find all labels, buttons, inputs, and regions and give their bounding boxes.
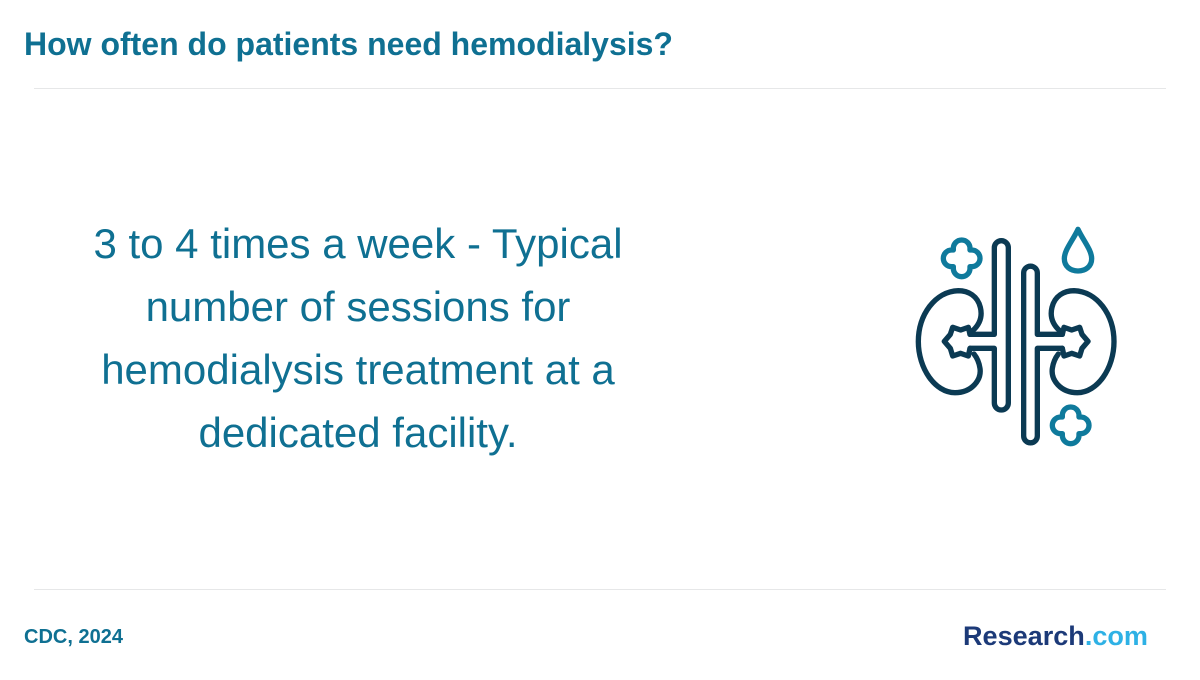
- right renal star: [1062, 327, 1088, 356]
- left kidney: [918, 291, 981, 393]
- icon: upper cross: [943, 240, 980, 277]
- right ureter tube: [1024, 266, 1062, 443]
- main statistic text: hemodialysis treatment at a: [101, 346, 615, 393]
- icon: water drop: [1064, 229, 1092, 271]
- left ureter tube: [970, 241, 1008, 410]
- title: How often do patients need hemodialysis?: [24, 26, 673, 62]
- main statistic text: [93, 220, 623, 456]
- source: CDC, 2024: [24, 626, 123, 648]
- left renal star: [944, 327, 970, 356]
- main statistic text: 3 to 4 times a week - Typical: [93, 220, 623, 267]
- icon: lower cross: [1052, 407, 1089, 444]
- main statistic text: dedicated facility.: [198, 409, 518, 456]
- right kidney: [1051, 291, 1114, 393]
- main statistic text: number of sessions for: [146, 283, 570, 330]
- icon: kidneys with drop and crosses: [916, 226, 1117, 446]
- logo: Research.com: Research.com: [963, 621, 1148, 651]
